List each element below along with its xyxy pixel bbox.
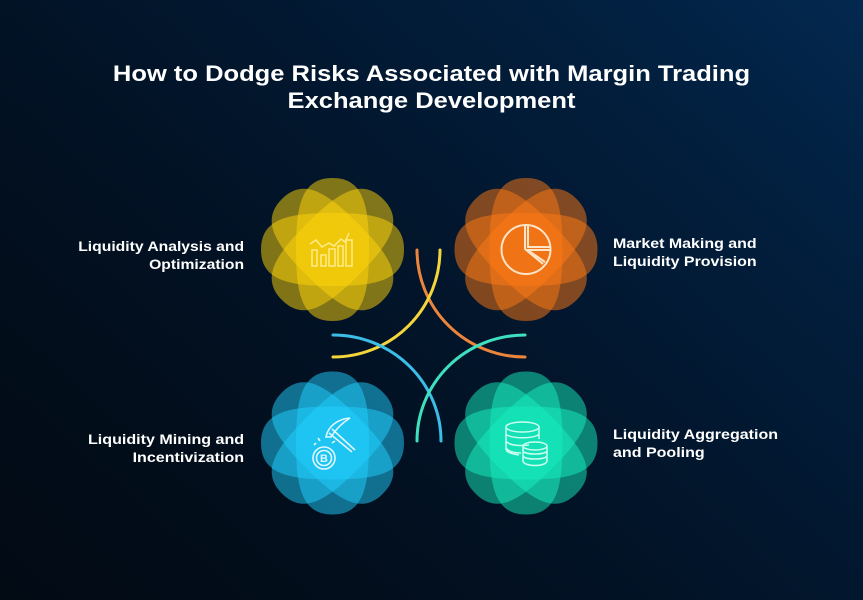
arc: teal — [417, 335, 525, 441]
label: liquidity mining: Liquidity Mining and — [88, 431, 244, 447]
arc: orange — [417, 250, 525, 357]
icon: coin stacks — [506, 422, 547, 466]
title — [113, 61, 750, 113]
label: liquidity aggregation: and Pooling — [613, 444, 705, 460]
flower: teal — [450, 367, 602, 519]
label: market making — [613, 235, 757, 269]
title: How to Dodge Risks Associated with Margin Trading — [113, 61, 750, 86]
arc: yellow — [333, 250, 440, 357]
label: liquidity mining — [88, 431, 244, 465]
icon: pickaxe and bitcoin — [313, 418, 355, 469]
flower: blue — [256, 367, 409, 519]
label: liquidity mining: Incentivization — [132, 449, 244, 465]
label: market making: Liquidity Provision — [613, 253, 757, 269]
label: liquidity aggregation — [613, 426, 778, 460]
title: Exchange Development — [288, 88, 575, 113]
label: liquidity analysis: Optimization — [149, 256, 244, 272]
icon: bar chart — [310, 233, 352, 266]
label: liquidity analysis — [78, 238, 244, 272]
flower: orange — [450, 173, 602, 326]
icon: pie chart — [502, 225, 550, 274]
arc: blue — [333, 335, 441, 441]
icon: pickaxe and bitcoin: B — [320, 453, 328, 465]
label: market making: Market Making and — [613, 235, 757, 251]
flower: yellow — [256, 173, 409, 326]
label: liquidity aggregation: Liquidity Aggregation — [613, 426, 778, 442]
label: liquidity analysis: Liquidity Analysis and — [78, 238, 244, 254]
